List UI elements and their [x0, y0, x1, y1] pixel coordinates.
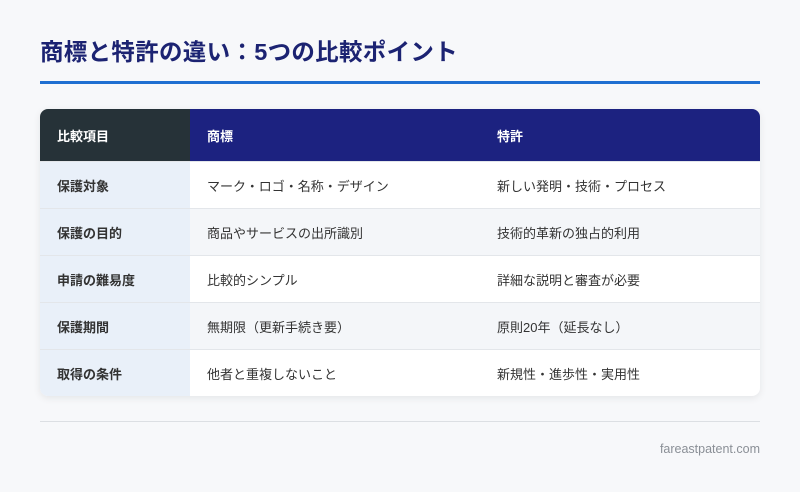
header row: 商標 [207, 128, 233, 144]
header row: 比較項目 [57, 128, 109, 144]
row: period: 無期限（更新手続き要） [207, 320, 350, 334]
row: purpose: 商品やサービスの出所識別 [207, 226, 363, 240]
row: conditions [40, 349, 760, 396]
header row: 特許 [497, 128, 523, 144]
row: conditions: 取得の条件 [57, 366, 122, 382]
row: difficulty: 比較的シンプル [207, 272, 298, 288]
row: period [40, 302, 760, 349]
row: purpose: 保護の目的 [57, 226, 122, 240]
row: purpose: 技術的革新の独占的利用 [497, 226, 640, 240]
row: conditions: 新規性・進歩性・実用性 [497, 366, 640, 382]
title: 商標と特許の違い：5つの比較ポイント [40, 39, 458, 65]
row: conditions: 他者と重複しないこと [207, 366, 337, 382]
source: fareastpatent.com [660, 442, 760, 456]
row: period: 保護期間 [57, 320, 109, 334]
row: difficulty: 申請の難易度 [57, 272, 135, 288]
row: protection target [40, 161, 760, 208]
header row [40, 109, 760, 161]
row: protection target: 保護対象 [57, 178, 109, 194]
comparison table [40, 109, 760, 396]
row: purpose [40, 208, 760, 255]
row: period: 原則20年（延長なし） [497, 320, 628, 334]
row: protection target: 新しい発明・技術・プロセス [497, 178, 666, 194]
row: protection target: マーク・ロゴ・名称・デザイン [207, 178, 389, 194]
row: difficulty: 詳細な説明と審査が必要 [497, 272, 640, 288]
row: difficulty [40, 255, 760, 302]
